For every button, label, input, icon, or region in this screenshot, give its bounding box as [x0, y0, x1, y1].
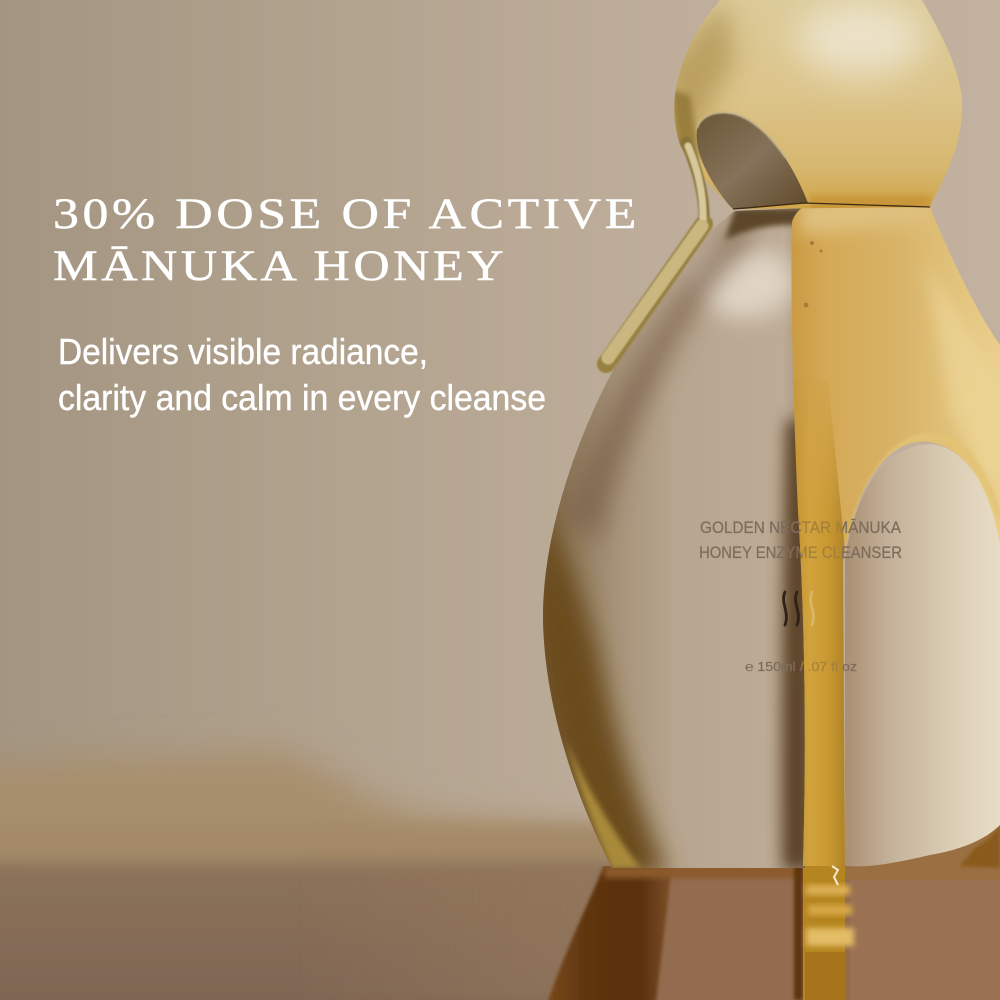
product label text: [699, 518, 902, 674]
product label text: GOLDEN NECTAR MĀNUKA: [700, 518, 902, 537]
shoulder shadow: [560, 225, 760, 540]
seam between cap and body: [733, 203, 930, 209]
shadow beside honey: [782, 420, 812, 870]
honey drip over bottle: [785, 195, 1000, 885]
title: [53, 191, 640, 290]
product label text: ℮ 150ml / .07 fl oz: [745, 659, 857, 674]
subheading: [58, 331, 546, 418]
specular glint: [832, 866, 838, 885]
title: MĀNUKA HONEY: [53, 243, 507, 290]
title: 30% DOSE OF ACTIVE: [53, 191, 640, 238]
shoulder highlight: [695, 246, 795, 318]
right body section under arch: [845, 444, 1000, 866]
subheading: clarity and calm in every cleanse: [58, 377, 546, 418]
glossy honey floor: [0, 862, 1000, 1000]
honey droplets: [804, 241, 822, 307]
cap opening: [697, 113, 808, 210]
bottle reflection: [546, 866, 1000, 1000]
lower left shadow: [530, 500, 668, 875]
subheading: Delivers visible radiance,: [58, 331, 428, 372]
pump cap: [660, 0, 965, 212]
blurred honey horizon: [0, 752, 640, 890]
product label text: HONEY ENZYME CLEANSER: [699, 543, 902, 562]
bottle body: [530, 205, 1000, 875]
icon: wavy brand mark: [784, 592, 813, 625]
thin honey drip from cap spout: [606, 142, 704, 364]
honey pool at right: [845, 822, 1000, 880]
